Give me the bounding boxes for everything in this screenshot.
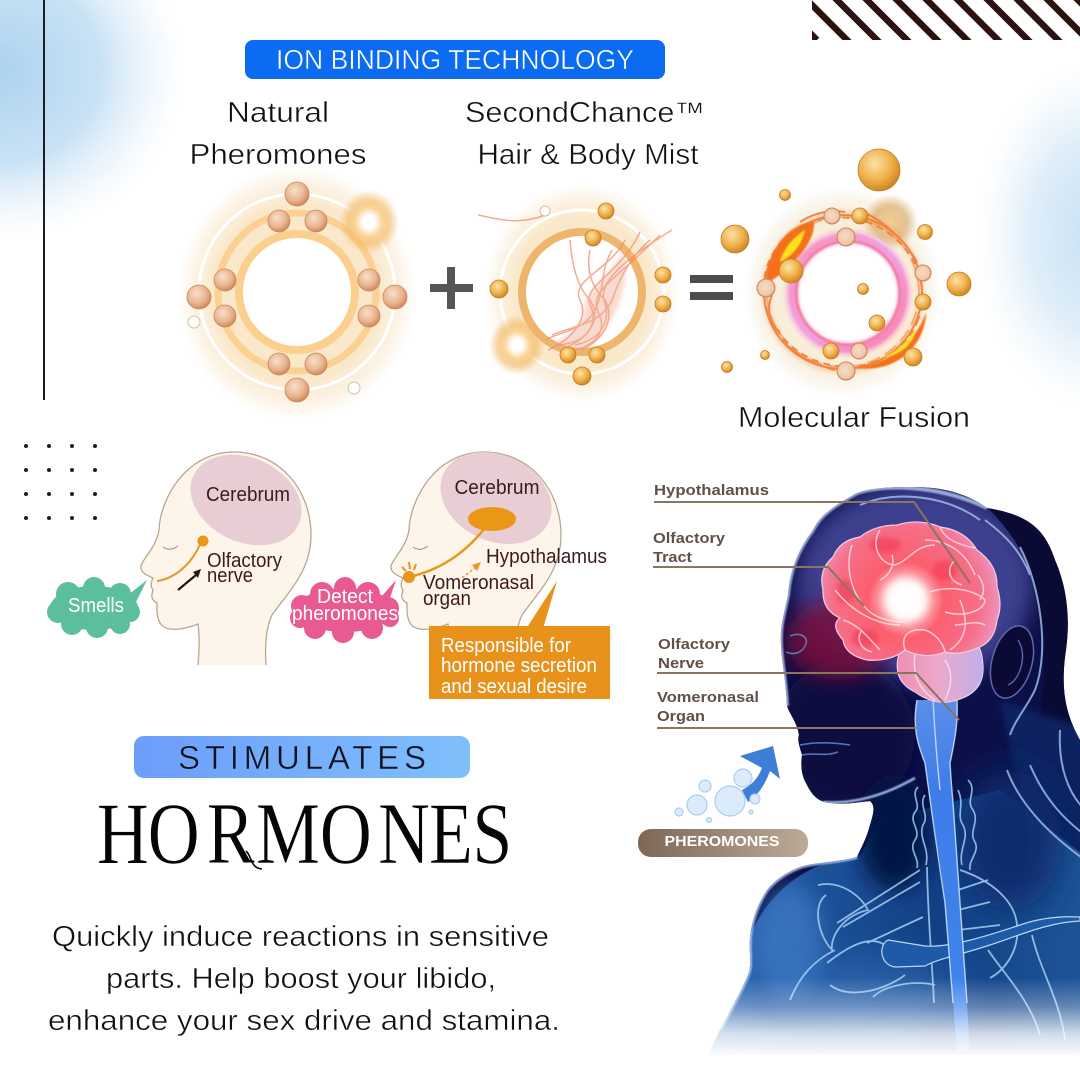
lower chest lightening (810, 952, 970, 1024)
vertebrae (913, 780, 976, 870)
flames (766, 222, 926, 369)
heading pill: ION BINDING TECHNOLOGY (276, 44, 634, 75)
label: secondchance mist (465, 97, 705, 171)
anatomy labels with leader lines: Tract (653, 550, 692, 566)
diagram: natural pheromones ring (177, 165, 417, 421)
callout: detect pheromones cloud: Detect (317, 586, 373, 608)
anatomy figure (709, 487, 1080, 1054)
clavicle (882, 917, 1080, 967)
label: natural pheromones: Pheromones (190, 139, 366, 171)
anatomy labels with leader lines (653, 483, 970, 728)
label: natural pheromones (190, 97, 366, 171)
callout: hormone secretion box (429, 581, 610, 699)
diagram: mist ring (478, 183, 680, 403)
diagram: pheromone pathway head (391, 435, 607, 665)
body text: parts. Help boost your libido, (106, 963, 496, 995)
main heading: HORMONES (97, 785, 512, 883)
label: natural pheromones: Natural (227, 97, 329, 129)
body text: Quickly induce reactions in sensitive (52, 921, 549, 953)
spinal cord (915, 700, 970, 1052)
callout: hormone secretion box: Responsible for (441, 635, 571, 657)
callout: detect pheromones cloud: pheromones (292, 603, 398, 625)
hair strands (860, 497, 1080, 860)
dark hair (988, 508, 1074, 728)
anatomy labels with leader lines: Olfactory (653, 531, 725, 547)
callout: smells cloud: Smells (68, 595, 124, 617)
bottom fade (680, 978, 1080, 1058)
jaw highlight (823, 778, 915, 802)
anatomy labels with leader lines: Hypothalamus (654, 483, 769, 499)
callout: detect pheromones cloud (290, 577, 399, 643)
anatomy labels with leader lines: Organ (657, 709, 705, 725)
lower hair (1000, 700, 1080, 860)
anatomy labels with leader lines: Nerve (658, 656, 704, 672)
right neck shade (960, 770, 1060, 910)
decorative vertical line (43, 0, 45, 400)
decorative stripes (812, 0, 1080, 40)
smoke wisps (478, 215, 672, 352)
spinal highlight (915, 695, 967, 1003)
head base (715, 487, 1080, 1040)
ear (990, 625, 1034, 699)
diagram: smell pathway head: Cerebrum (206, 484, 290, 506)
diagram: pheromone pathway head: organ (423, 588, 471, 610)
shoulder highlight (756, 885, 824, 1005)
subheading pill: STIMULATES (178, 739, 426, 776)
plus sign (430, 267, 473, 309)
torso (700, 790, 1080, 1060)
label: secondchance mist: SecondChance™ (465, 97, 705, 129)
brain (822, 522, 1000, 702)
diagram: smell pathway head (141, 437, 316, 665)
decorative dot grid (24, 444, 97, 520)
diagram: pheromone pathway head: Hypothalamus (486, 546, 607, 568)
anatomy labels with leader lines: Olfactory (658, 637, 730, 653)
callout: hormone secretion box: and sexual desire (441, 676, 587, 698)
neck shadow (859, 780, 931, 890)
diagram: molecular fusion ring (721, 149, 971, 398)
shoulder bones and ribs (790, 867, 1065, 1040)
face details (786, 634, 850, 755)
diagram: smell pathway head: Olfactory (207, 550, 282, 572)
body text: enhance your sex drive and stamina. (48, 1005, 560, 1037)
subheading pill (134, 736, 470, 778)
diagram: pheromone pathway head: Vomeronasal (423, 572, 534, 594)
skull band (797, 485, 1033, 685)
equals sign (690, 275, 733, 300)
label pill: pheromones: PHEROMONES (664, 834, 780, 850)
diagram: pheromone pathway head: Cerebrum (454, 477, 540, 499)
label pill: pheromones (638, 829, 808, 857)
lower face shadow (785, 660, 908, 812)
callout: hormone secretion box: hormone secretion (441, 655, 597, 677)
silhouette edge glow (720, 488, 987, 1030)
label: secondchance mist: Hair & Body Mist (478, 139, 699, 171)
body text (48, 921, 560, 1037)
label: molecular fusion: Molecular Fusion (738, 402, 970, 434)
callout: smells cloud (47, 577, 147, 638)
icon: pheromone bubbles and arrow (675, 746, 780, 822)
anatomy labels with leader lines: Vomeronasal (657, 690, 759, 706)
diagram: smell pathway head: nerve (207, 565, 253, 587)
forehead red glow (786, 600, 890, 680)
